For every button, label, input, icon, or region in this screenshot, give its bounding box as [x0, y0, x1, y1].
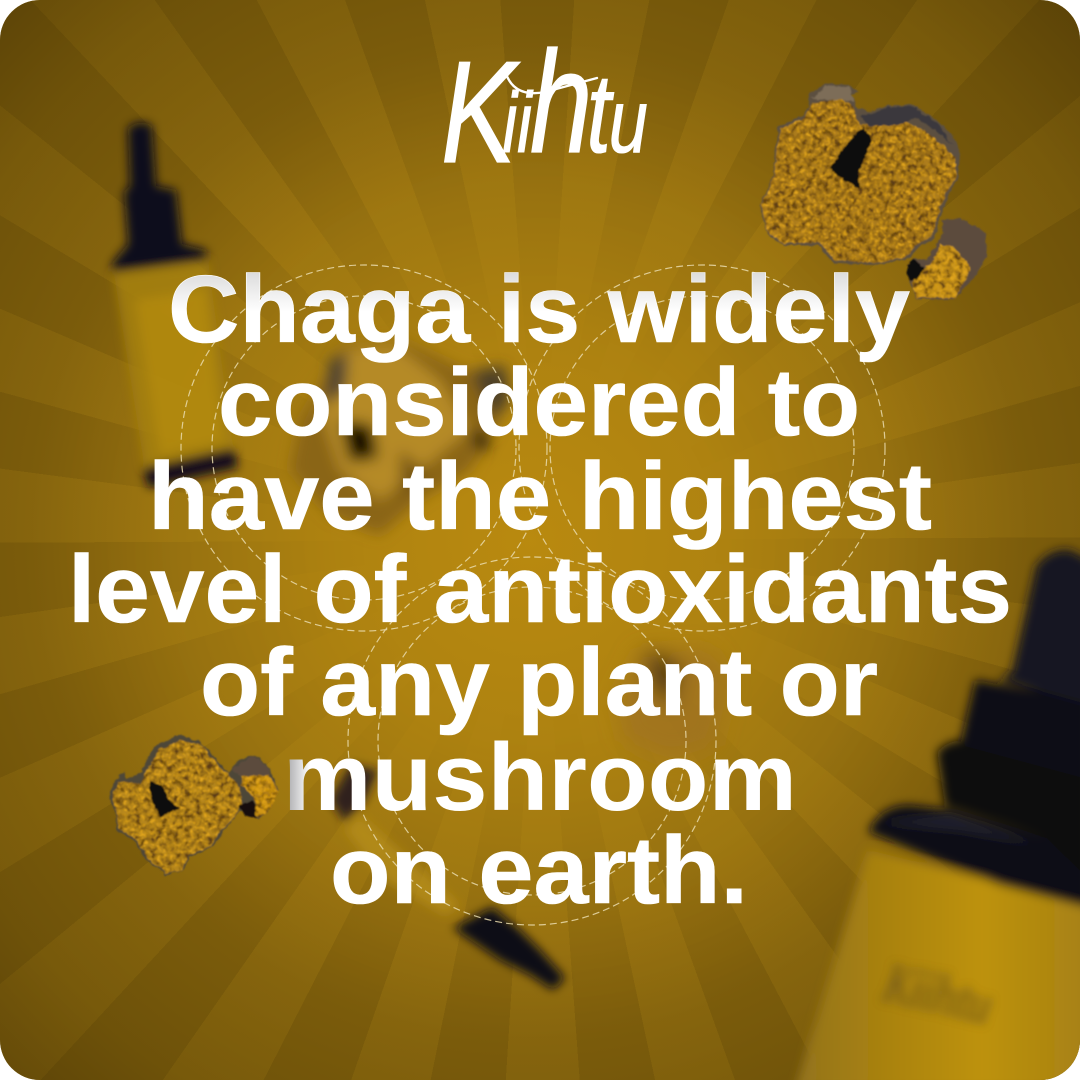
blurred chaga lower right: [615, 650, 730, 760]
logo flourish: [506, 74, 597, 93]
headline line 4: level of antioxidants: [68, 536, 1012, 643]
blurred large bottle bottom right: [795, 550, 1080, 1080]
headline line 1: Chaga is widely: [168, 256, 910, 363]
logo: Kiihtu: [441, 21, 648, 193]
blurred chaga centre: [290, 340, 510, 535]
blurred upside-down bottle: [330, 765, 565, 990]
headline line 6: mushroom: [283, 724, 797, 831]
headline line 7: on earth.: [330, 817, 748, 924]
headline text: [68, 256, 1012, 924]
headline line 2: considered to: [218, 349, 860, 456]
logo: Kiihtu: htu: [530, 21, 648, 183]
blurred bottle upper left: [112, 122, 238, 488]
decorative dashed circles: [181, 265, 885, 925]
icon: chaga chunk lower left: [108, 735, 278, 875]
headline line 5: of any plant or: [200, 629, 878, 736]
icon: chaga chunk top right: [760, 83, 987, 300]
bottle label blur: Kiihtu: [876, 949, 999, 1037]
logo: Kiihtu: K: [441, 31, 521, 193]
headline line 3: have the highest: [148, 443, 932, 550]
logo: Kiihtu: ii: [502, 76, 534, 171]
